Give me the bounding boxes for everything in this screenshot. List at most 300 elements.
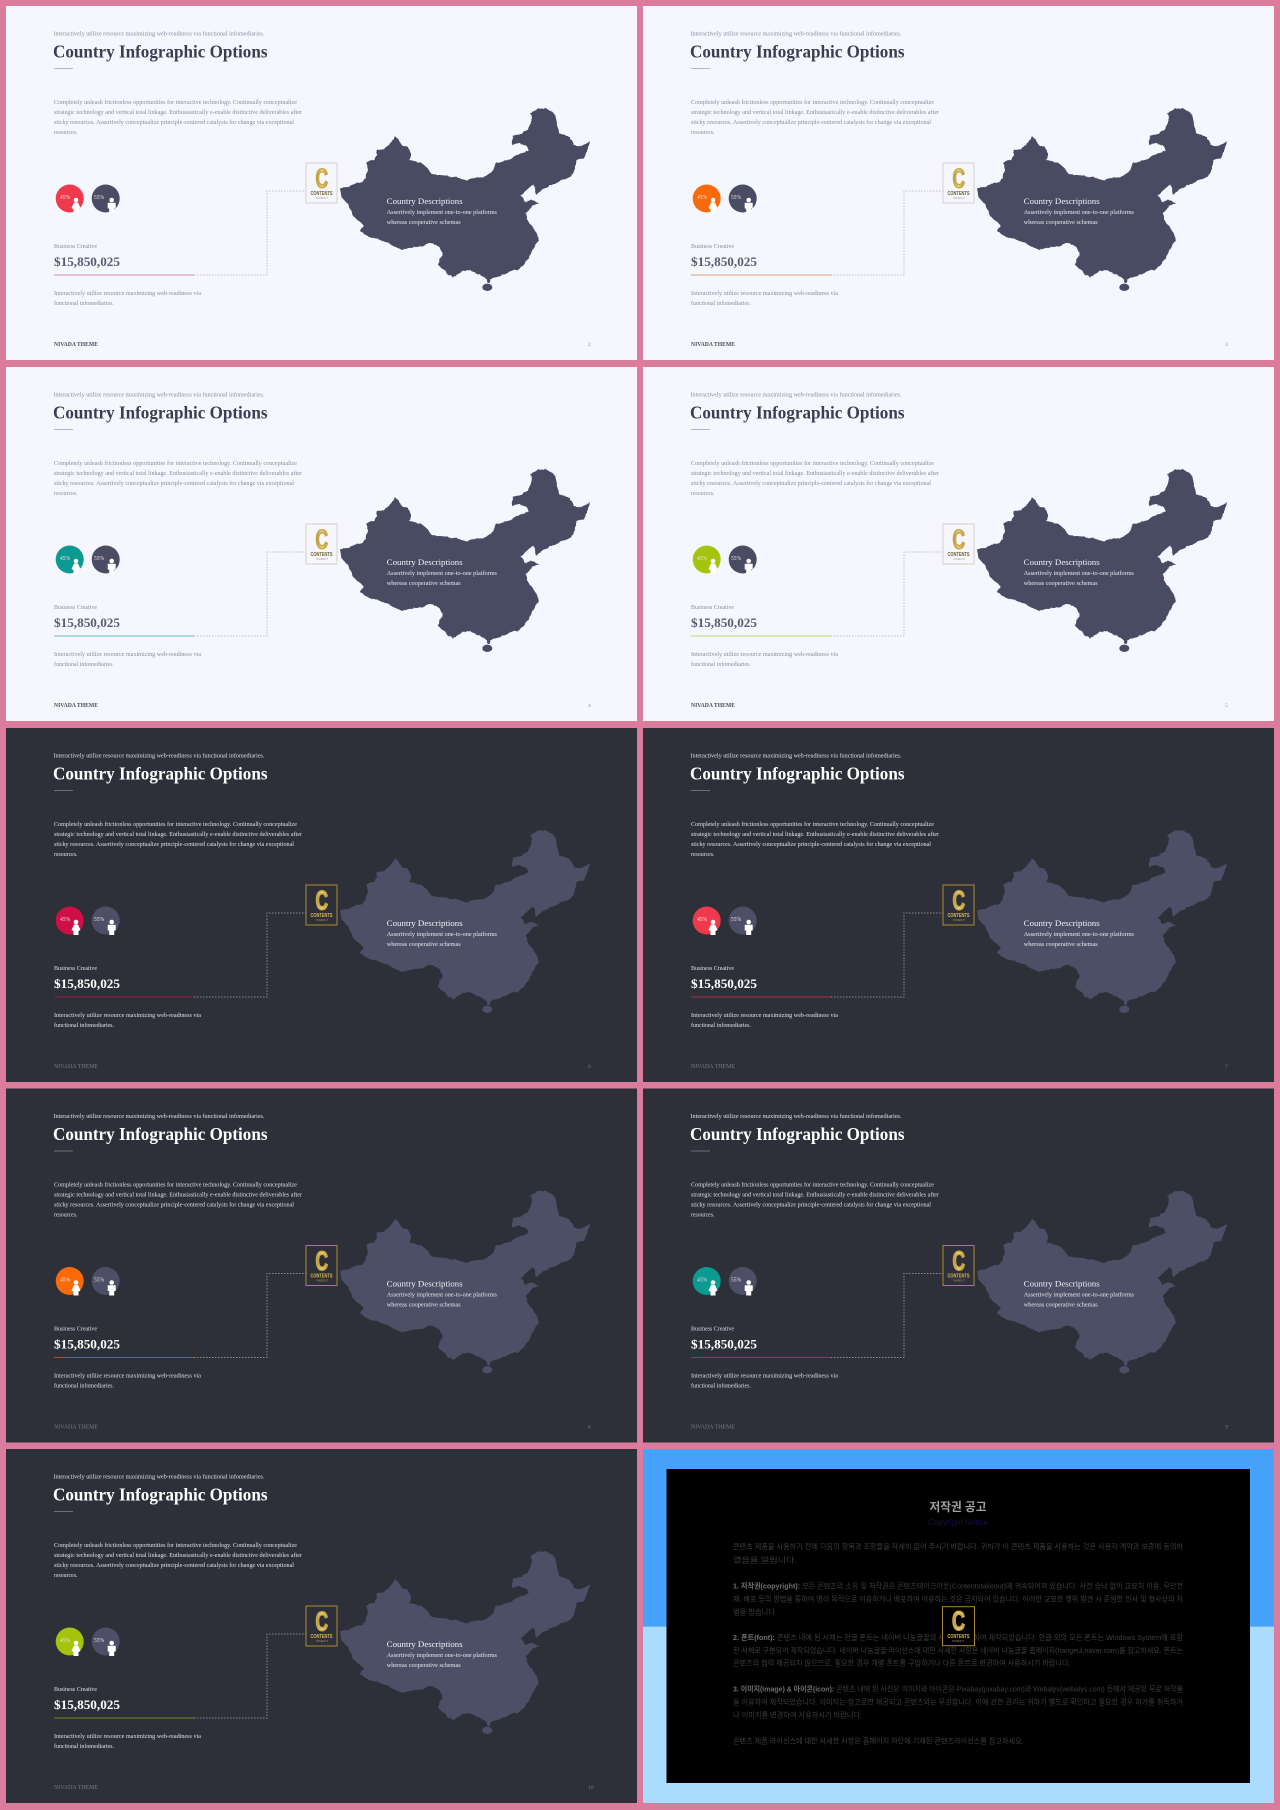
- China map: [977, 1191, 1226, 1373]
- title: Country Infographic Options: [690, 42, 904, 62]
- caption: Interactively utilize resource maximizing web-readiness via: [54, 651, 201, 658]
- stat circle: male 55%: [729, 546, 757, 574]
- panel: slide 6 dark crimson: [6, 728, 637, 1082]
- body paragraph: Completely unleash frictionless opportunities for interactive technology. Continually conceptualize: [54, 99, 297, 106]
- body paragraph: resources.: [691, 129, 715, 136]
- logo: [306, 885, 337, 925]
- footer brand: NIVADA THEME: [54, 1785, 98, 1791]
- map text: Assertively implement one-to-one platforms: [387, 1292, 498, 1298]
- stat circle: male 55%: [92, 1267, 120, 1296]
- caption: functional infomediaries.: [54, 1382, 114, 1390]
- amount: $15,850,025: [54, 616, 120, 630]
- label: Business Creative: [54, 965, 97, 972]
- title: Country Infographic Options: [690, 1124, 904, 1144]
- page number: 8: [588, 1424, 591, 1430]
- logo: C: [316, 1606, 328, 1636]
- stat circle: female 45%: 45%: [60, 195, 70, 201]
- amount: $15,850,025: [691, 616, 757, 630]
- logo: [306, 163, 337, 203]
- map text: whereas cooperative schemas: [1024, 1302, 1098, 1308]
- caption: functional infomediaries.: [54, 661, 114, 668]
- map text: [1024, 196, 1135, 226]
- map text: whereas cooperative schemas: [387, 1662, 461, 1669]
- body paragraph: strategic technology and vertical total linkage. Enthusiastically e-enable distinctive deliverables after: [691, 1192, 940, 1198]
- map text: whereas cooperative schemas: [387, 219, 461, 226]
- stat circle: male 55%: 55%: [731, 917, 741, 923]
- stat circle: female 45%: 45%: [697, 917, 707, 923]
- stat circle: female 45%: [56, 906, 84, 935]
- label: Business Creative: [691, 243, 734, 250]
- label: Business Creative: [691, 604, 734, 611]
- page number: 9: [1225, 1424, 1228, 1430]
- map text: [387, 1278, 498, 1308]
- caption: [691, 1372, 838, 1390]
- footer brand: NIVADA THEME: [691, 703, 735, 709]
- stat circle: male 55%: 55%: [731, 195, 741, 201]
- map text: whereas cooperative schemas: [1024, 580, 1098, 587]
- accent line: [54, 274, 194, 276]
- caption: [54, 651, 201, 668]
- caption: Interactively utilize resource maximizing web-readiness via: [54, 1733, 201, 1740]
- stat circle: male 55%: [729, 906, 757, 935]
- amount: $15,850,025: [54, 977, 120, 991]
- logo: C: [316, 164, 328, 194]
- caption: functional infomediaries.: [691, 1382, 751, 1390]
- body paragraph: [691, 99, 940, 136]
- intro line: Interactively utilize resource maximizing web-readiness via functional infomediaries.: [54, 30, 265, 38]
- panel: slide 3 light orange: [643, 6, 1274, 360]
- caption: [691, 290, 838, 307]
- body paragraph: sticky resources. Assertively conceptualize principle-centered catalysts for change via exceptional: [691, 841, 931, 848]
- panel: copyright notice: [643, 1449, 1274, 1803]
- title: Country Infographic Options: [53, 764, 268, 784]
- stat circle: female 45%: 45%: [697, 556, 707, 562]
- intro paragraph: 콘텐츠 제품을 사용하기 전에 다음의 항목과 조항들을 자세히 읽어 주시기 바랍니다. 귀하가 이 콘텐츠 제품을 사용하는 것은 사용자 계약과 보증에 동의하: [733, 1541, 1183, 1551]
- stat circle: female 45%: [56, 1628, 84, 1656]
- body paragraph: Completely unleash frictionless opportunities for interactive technology. Continually conceptualize: [54, 1542, 297, 1549]
- dotted connector: [194, 1634, 306, 1718]
- title: Country Infographic Options: [53, 402, 268, 422]
- clause 1: [733, 1580, 1183, 1616]
- page number: 7: [1225, 1064, 1228, 1070]
- intro line: Interactively utilize resource maximizing web-readiness via functional infomediaries.: [54, 752, 265, 760]
- label: Business Creative: [54, 1326, 97, 1332]
- caption: [54, 1012, 201, 1029]
- China map: [340, 108, 589, 291]
- body paragraph: Completely unleash frictionless opportunities for interactive technology. Continually conceptualize: [691, 1182, 934, 1188]
- body paragraph: [691, 1182, 940, 1218]
- logo: CONTENTS: [310, 552, 333, 558]
- map text: whereas cooperative schemas: [387, 1302, 461, 1308]
- body paragraph: resources.: [691, 490, 715, 497]
- caption: [54, 1372, 201, 1390]
- slide background: [6, 1449, 637, 1803]
- map text: Assertively implement one-to-one platforms: [1024, 209, 1135, 216]
- caption: [691, 651, 838, 668]
- stat circle: female 45%: [693, 184, 721, 213]
- stat circle: female 45%: 45%: [697, 195, 707, 201]
- logo: TAKEOUT: [952, 1640, 964, 1643]
- map text: [1024, 918, 1135, 948]
- map text: [387, 557, 498, 587]
- body paragraph: [54, 821, 303, 858]
- body paragraph: [54, 460, 303, 497]
- body paragraph: strategic technology and vertical total linkage. Enthusiastically e-enable distinctive deliverables after: [691, 109, 940, 116]
- caption: [54, 1733, 201, 1750]
- accent line: [54, 635, 194, 637]
- logo: TAKEOUT: [953, 919, 965, 922]
- intro line: Interactively utilize resource maximizing web-readiness via functional infomediaries.: [690, 1113, 902, 1120]
- logo: [306, 1246, 337, 1286]
- map text: Assertively implement one-to-one platforms: [387, 1652, 498, 1659]
- amount: $15,850,025: [691, 255, 757, 269]
- China map: [340, 1191, 589, 1373]
- map text: Assertively implement one-to-one platforms: [387, 570, 498, 577]
- body paragraph: strategic technology and vertical total linkage. Enthusiastically e-enable distinctive deliverables after: [691, 831, 940, 838]
- stat circle: female 45%: [693, 546, 721, 574]
- logo: [942, 1606, 974, 1646]
- intro line: Interactively utilize resource maximizing web-readiness via functional infomediaries.: [690, 392, 902, 398]
- title: Country Infographic Options: [53, 42, 268, 62]
- stat circle: male 55%: 55%: [94, 917, 104, 923]
- accent line: [691, 635, 831, 637]
- dotted connector: [831, 552, 943, 636]
- slide background: [6, 728, 637, 1082]
- logo: C: [316, 1246, 328, 1276]
- title: Country Infographic Options: [690, 764, 904, 784]
- logo: CONTENTS: [948, 1634, 970, 1640]
- China map: [340, 1551, 589, 1734]
- logo: C: [952, 524, 965, 554]
- map text: Country Descriptions: [387, 1639, 463, 1649]
- map text: Country Descriptions: [1024, 196, 1100, 206]
- logo: TAKEOUT: [316, 1640, 328, 1643]
- dotted connector: [831, 191, 943, 275]
- accent line: [691, 274, 831, 276]
- page number: 6: [588, 1064, 591, 1070]
- panel: slide 4 light teal: [6, 367, 637, 721]
- clause 3: 을 이용하여 제작되었습니다. 이미지는 참고로만 제공되고 콘텐츠와는 무관합니다. 이에 관한 권리는 귀하가 별도로 확인하고 필요한 경우 허가를 취득하거: [733, 1696, 1183, 1706]
- body paragraph: sticky resources. Assertively conceptualize principle-centered catalysts for change via exceptional: [54, 1562, 294, 1569]
- logo: CONTENTS: [948, 552, 970, 558]
- body paragraph: sticky resources. Assertively conceptualize principle-centered catalysts for change via exceptional: [54, 480, 294, 487]
- dotted connector: [194, 191, 306, 275]
- map text: Assertively implement one-to-one platforms: [387, 209, 498, 216]
- map text: [1024, 557, 1135, 587]
- amount: $15,850,025: [54, 1338, 120, 1352]
- accent line: [54, 1717, 194, 1719]
- blue band: [643, 1449, 1274, 1627]
- map text: whereas cooperative schemas: [387, 580, 461, 587]
- accent line: [54, 996, 194, 998]
- caption: Interactively utilize resource maximizing web-readiness via: [691, 651, 838, 658]
- map text: Country Descriptions: [1024, 918, 1100, 928]
- closing line: 콘텐츠 제품 라이선스에 대한 사세한 사항은 홈페이지 하단에 기재된 콘텐츠라이선스를 참고하세요.: [733, 1736, 1024, 1746]
- dotted connector: [831, 913, 943, 997]
- logo: C: [952, 886, 965, 916]
- slide background: [6, 6, 637, 360]
- stat circle: female 45%: [56, 1267, 84, 1296]
- dotted connector: [194, 913, 306, 997]
- footer brand: NIVADA THEME: [54, 342, 98, 348]
- caption: functional infomediaries.: [54, 1022, 114, 1029]
- stat circle: male 55%: 55%: [731, 1278, 741, 1284]
- map text: Assertively implement one-to-one platforms: [1024, 931, 1135, 938]
- slide background: [6, 367, 637, 721]
- stat circle: male 55%: 55%: [94, 195, 104, 201]
- slide background: [6, 1088, 637, 1442]
- logo: TAKEOUT: [316, 919, 328, 922]
- caption: [54, 290, 201, 307]
- China map: [340, 830, 589, 1013]
- China map: [977, 469, 1226, 652]
- footer brand: NIVADA THEME: [54, 703, 98, 709]
- body paragraph: Completely unleash frictionless opportunities for interactive technology. Continually conceptualize: [54, 1182, 297, 1188]
- label: Business Creative: [691, 965, 734, 972]
- body paragraph: Completely unleash frictionless opportunities for interactive technology. Continually conceptualize: [691, 99, 934, 106]
- China map: [340, 469, 589, 652]
- map text: Assertively implement one-to-one platforms: [1024, 570, 1135, 577]
- footer brand: NIVADA THEME: [54, 1064, 98, 1070]
- stat circle: female 45%: 45%: [60, 1638, 70, 1644]
- map text: Country Descriptions: [387, 918, 463, 928]
- logo: [943, 1246, 974, 1286]
- body paragraph: strategic technology and vertical total linkage. Enthusiastically e-enable distinctive deliverables after: [54, 1552, 303, 1559]
- map text: Assertively implement one-to-one platforms: [1024, 1292, 1135, 1298]
- clause 1: 재, 배포 등의 방법을 통하여 영리 목적으로 이용하거나 배포하여 이용하는 것은 금지되어 있습니다. 이러한 교묘한 행위 발견 시 준엄한 민사 및 형사상의 처: [733, 1594, 1183, 1604]
- map text: Country Descriptions: [1024, 1278, 1100, 1288]
- title: Country Infographic Options: [53, 1484, 268, 1504]
- clause 2: 2. 폰트(font): 콘텐츠 내에 된 서체는 한글 폰트는 네이버 나눔글꼴의 서체와 동일하여 제작되었습니다. 한글 외의 모든 폰트는 Windows System에 포함: [733, 1632, 1183, 1642]
- map text: Assertively implement one-to-one platforms: [387, 931, 498, 938]
- label: Business Creative: [691, 1326, 734, 1332]
- map text: [387, 1639, 498, 1669]
- logo: CONTENTS: [948, 913, 970, 919]
- caption: Interactively utilize resource maximizing web-readiness via: [54, 1372, 201, 1380]
- caption: Interactively utilize resource maximizing web-readiness via: [691, 1372, 838, 1380]
- label: Business Creative: [54, 243, 97, 250]
- map text: [1024, 1278, 1135, 1308]
- stat circle: male 55%: 55%: [94, 556, 104, 562]
- map text: [387, 196, 498, 226]
- logo: CONTENTS: [310, 191, 333, 197]
- logo: CONTENTS: [310, 913, 333, 919]
- clause 1: 1. 저작권(copyright): 모든 콘텐츠의 소유 및 저작권은 콘텐츠테이크아웃(Contentstakeout)에 귀속되어져 있습니다. 사전 승낙 없이 교묘히 이용, 무단전: [733, 1580, 1183, 1590]
- logo: CONTENTS: [310, 1274, 333, 1280]
- page number: 2: [588, 342, 591, 348]
- amount: $15,850,025: [54, 255, 120, 269]
- body paragraph: sticky resources. Assertively conceptualize principle-centered catalysts for change via exceptional: [54, 119, 294, 126]
- logo: C: [952, 1246, 965, 1276]
- body paragraph: strategic technology and vertical total linkage. Enthusiastically e-enable distinctive deliverables after: [54, 831, 303, 838]
- stat circle: female 45%: 45%: [60, 556, 70, 562]
- body paragraph: strategic technology and vertical total linkage. Enthusiastically e-enable distinctive deliverables after: [54, 470, 303, 477]
- dotted connector: [194, 1274, 306, 1358]
- intro line: Interactively utilize resource maximizing web-readiness via functional infomediaries.: [690, 30, 902, 38]
- clause 2: 콘텐츠의 협력 제공되지 않으므로, 필요한 경우 개별 폰트를 구입하거나 다른 폰트로 변경하여 사용하시기 바랍니다.: [733, 1658, 1070, 1668]
- intro line: Interactively utilize resource maximizing web-readiness via functional infomediaries.: [54, 392, 265, 398]
- amount: $15,850,025: [691, 1338, 757, 1352]
- slide background: [643, 728, 1274, 1082]
- caption: functional infomediaries.: [54, 300, 114, 307]
- map text: Country Descriptions: [1024, 557, 1100, 567]
- logo: CONTENTS: [948, 1274, 970, 1280]
- body paragraph: sticky resources. Assertively conceptualize principle-centered catalysts for change via exceptional: [691, 480, 931, 487]
- clause 2: [733, 1632, 1183, 1668]
- stat circle: male 55%: [92, 184, 120, 213]
- body paragraph: Completely unleash frictionless opportunities for interactive technology. Continually conceptualize: [54, 460, 297, 467]
- logo: C: [316, 886, 328, 916]
- page number: 10: [588, 1785, 594, 1791]
- caption: functional infomediaries.: [691, 661, 751, 668]
- dotted connector: [194, 552, 306, 636]
- logo: TAKEOUT: [953, 558, 965, 561]
- logo: C: [952, 1606, 965, 1636]
- map text: [387, 918, 498, 948]
- label: Business Creative: [54, 1686, 97, 1693]
- body paragraph: sticky resources. Assertively conceptualize principle-centered catalysts for change via exceptional: [691, 1202, 931, 1208]
- slide background: [643, 6, 1274, 360]
- caption: functional infomediaries.: [54, 1743, 114, 1750]
- logo: TAKEOUT: [953, 197, 965, 200]
- stat circle: female 45%: 45%: [60, 917, 70, 923]
- logo: TAKEOUT: [316, 1280, 328, 1282]
- caption: Interactively utilize resource maximizing web-readiness via: [691, 290, 838, 297]
- body paragraph: Completely unleash frictionless opportunities for interactive technology. Continually conceptualize: [691, 821, 934, 828]
- title: Country Infographic Options: [690, 402, 904, 422]
- map text: whereas cooperative schemas: [387, 941, 461, 948]
- intro paragraph: [733, 1541, 1183, 1564]
- caption: Interactively utilize resource maximizing web-readiness via: [54, 290, 201, 297]
- stat circle: female 45%: 45%: [697, 1278, 707, 1284]
- map text: Country Descriptions: [387, 196, 463, 206]
- panel: slide 2 light red: [6, 6, 637, 360]
- stat circle: male 55%: [92, 546, 120, 574]
- body paragraph: Completely unleash frictionless opportunities for interactive technology. Continually conceptualize: [54, 821, 297, 828]
- notice subheading: Copyright Notice: [928, 1518, 989, 1527]
- body paragraph: resources.: [691, 1212, 715, 1218]
- stat circle: male 55%: [729, 1267, 757, 1296]
- body paragraph: [54, 1542, 303, 1579]
- logo: [943, 163, 974, 203]
- amount: $15,850,025: [54, 1698, 120, 1712]
- panel: slide 9 dark teal: [643, 1088, 1274, 1442]
- logo: C: [316, 524, 328, 554]
- body paragraph: resources.: [54, 1572, 78, 1579]
- stat circle: female 45%: [56, 546, 84, 574]
- notice heading: 저작권 공고: [930, 1499, 986, 1514]
- accent line: [691, 996, 831, 998]
- intro line: Interactively utilize resource maximizing web-readiness via functional infomediaries.: [690, 752, 902, 760]
- stat circle: male 55%: 55%: [94, 1278, 104, 1284]
- clause 2: 된 서체로 구분되어 제작되었습니다. 네이버 나눔글꼴 라이선스에 대한 사세한 사항은 네이버 나눔글꼴 홈페이지(hangeul.naver.com)를 참고하세요. 폰트는: [733, 1645, 1183, 1655]
- page number: 4: [588, 703, 591, 709]
- stat circle: male 55%: 55%: [731, 556, 741, 562]
- stat circle: male 55%: [92, 1628, 120, 1656]
- footer brand: NIVADA THEME: [691, 1424, 735, 1430]
- body paragraph: sticky resources. Assertively conceptualize principle-centered catalysts for change via exceptional: [54, 841, 294, 848]
- logo: CONTENTS: [310, 1634, 333, 1640]
- body paragraph: strategic technology and vertical total linkage. Enthusiastically e-enable distinctive deliverables after: [54, 109, 303, 116]
- stat circle: female 45%: [693, 1267, 721, 1296]
- logo: TAKEOUT: [953, 1280, 965, 1282]
- panel: slide 10 dark lime: [6, 1449, 637, 1803]
- stat circle: male 55%: 55%: [94, 1638, 104, 1644]
- caption: Interactively utilize resource maximizing web-readiness via: [54, 1012, 201, 1019]
- slide background: [643, 367, 1274, 721]
- body paragraph: [54, 99, 303, 136]
- body paragraph: [54, 1182, 303, 1218]
- body paragraph: sticky resources. Assertively conceptualize principle-centered catalysts for change via exceptional: [54, 1202, 294, 1208]
- page number: 3: [1225, 342, 1228, 348]
- accent line: [54, 1356, 194, 1358]
- map text: Country Descriptions: [387, 1278, 463, 1288]
- body paragraph: Completely unleash frictionless opportunities for interactive technology. Continually conceptualize: [691, 460, 934, 467]
- caption: Interactively utilize resource maximizing web-readiness via: [691, 1012, 838, 1019]
- map text: whereas cooperative schemas: [1024, 941, 1098, 948]
- caption: functional infomediaries.: [691, 300, 751, 307]
- light blue background: [643, 1449, 1274, 1803]
- logo: [943, 524, 974, 564]
- black notice card: [666, 1469, 1250, 1783]
- intro paragraph: 였음을 알립니다.: [733, 1554, 797, 1564]
- body paragraph: strategic technology and vertical total linkage. Enthusiastically e-enable distinctive deliverables after: [691, 470, 940, 477]
- clause 3: 나 이미지를 변경하여 사용하시기 바랍니다.: [733, 1710, 862, 1720]
- footer brand: NIVADA THEME: [691, 1064, 735, 1070]
- body paragraph: resources.: [691, 851, 715, 858]
- page number: 5: [1225, 703, 1228, 709]
- clause 1: 벌을 받습니다.: [733, 1606, 777, 1616]
- body paragraph: strategic technology and vertical total linkage. Enthusiastically e-enable distinctive deliverables after: [54, 1192, 303, 1198]
- logo: TAKEOUT: [316, 197, 328, 200]
- clause 3: [733, 1684, 1183, 1720]
- map text: whereas cooperative schemas: [1024, 219, 1098, 226]
- amount: $15,850,025: [691, 977, 757, 991]
- body paragraph: resources.: [54, 129, 78, 136]
- China map: [977, 830, 1226, 1013]
- caption: [691, 1012, 838, 1029]
- title: Country Infographic Options: [53, 1124, 268, 1144]
- slide background: [643, 1088, 1274, 1442]
- stat circle: male 55%: [729, 184, 757, 213]
- logo: [306, 524, 337, 564]
- panel: slide 8 dark orange: [6, 1088, 637, 1442]
- dotted connector: [831, 1274, 943, 1358]
- body paragraph: resources.: [54, 490, 78, 497]
- logo: CONTENTS: [948, 191, 970, 197]
- China map: [977, 108, 1226, 291]
- logo: TAKEOUT: [316, 558, 328, 561]
- body paragraph: [691, 821, 940, 858]
- stat circle: female 45%: [693, 906, 721, 935]
- stat circle: female 45%: [56, 184, 84, 213]
- intro line: Interactively utilize resource maximizing web-readiness via functional infomediaries.: [54, 1474, 265, 1480]
- logo: C: [952, 164, 965, 194]
- panel: slide 5 light lime: [643, 367, 1274, 721]
- caption: functional infomediaries.: [691, 1022, 751, 1029]
- map text: Country Descriptions: [387, 557, 463, 567]
- body paragraph: resources.: [54, 1212, 78, 1218]
- logo: [306, 1606, 337, 1646]
- stat circle: male 55%: [92, 906, 120, 935]
- logo: [943, 885, 974, 925]
- footer brand: NIVADA THEME: [691, 342, 735, 348]
- label: Business Creative: [54, 604, 97, 611]
- clause 3: 3. 이미지(image) & 아이콘(icon): 콘텐츠 내에 된 사진은 이미지와 아이콘은 Pixabay(pixabay.com)와 Webalys(webalys.com) 등에서 제공된 무료 저작물: [733, 1684, 1183, 1694]
- panel: slide 7 dark red: [643, 728, 1274, 1082]
- body paragraph: sticky resources. Assertively conceptualize principle-centered catalysts for change via exceptional: [691, 119, 931, 126]
- body paragraph: resources.: [54, 851, 78, 858]
